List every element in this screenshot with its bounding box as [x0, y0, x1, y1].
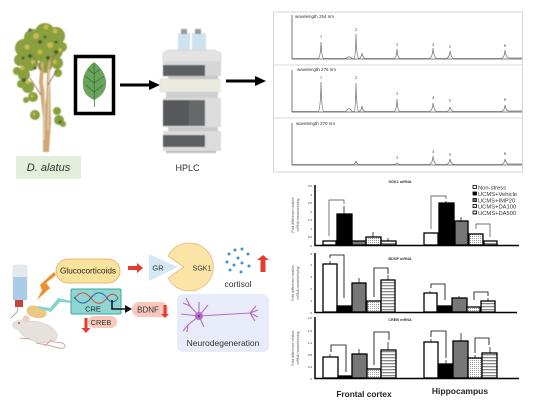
- bar chart: SGK1 mRNA: 1.5: [308, 218, 312, 222]
- chart legend: [473, 186, 517, 217]
- label: D. alatus: [16, 156, 81, 179]
- label: cortisol: cortisol: [225, 279, 252, 289]
- bar chart: SGK1 mRNA: SGK1 mRNA: [388, 180, 412, 184]
- bar chart: SGK1 mRNA: 0: [310, 244, 312, 248]
- callout: CREB: CREB: [91, 318, 111, 327]
- icon: mouse: [12, 316, 65, 348]
- callout: Glucocorticoids: [56, 259, 120, 283]
- bar chart: SGK1 mRNA: 3.5: [308, 184, 312, 188]
- icon: cortisol dots: [226, 248, 250, 274]
- chromatogram: wavelength 370 nm: wavelength 370 nm: [296, 121, 335, 126]
- panel: CRE with DNA: [71, 289, 121, 314]
- bar chart: CREB mRNA: CREB mRNA: [388, 318, 412, 322]
- bar chart: BDNF mRNA: 1: [310, 299, 312, 303]
- chart legend: UCMS+IMP20: [478, 198, 515, 204]
- bar chart: BDNF mRNA: 2: [310, 287, 312, 291]
- icon: SGK1 enzyme: SGK1: [193, 266, 211, 272]
- bar chart: BDNF mRNA: 5: [310, 252, 312, 256]
- bar chart: BDNF mRNA: 3: [310, 275, 312, 279]
- callout: BDNF: BDNF: [137, 306, 159, 314]
- bar chart: CREB mRNA: 0.8: [308, 353, 312, 357]
- chromatogram: wavelength 370 nm: 5: [449, 152, 452, 157]
- chromatogram: wavelength 370 nm: 4: [432, 149, 435, 154]
- arrow: cortisol up: [257, 255, 269, 272]
- bar chart: SGK1 mRNA: 2: [310, 210, 312, 214]
- icon: GR receptor: GR: [152, 264, 164, 272]
- chromatogram: wavelength 275 nm: wavelength 275 nm: [297, 67, 336, 72]
- callout: CREB: [82, 316, 117, 333]
- bar chart: CREB mRNA: mRNA housekeeping: [296, 332, 300, 364]
- bar chart: BDNF mRNA: mRNA housekeeping: [296, 267, 300, 299]
- bar chart: CREB mRNA: 1.6: [308, 329, 312, 333]
- chromatogram: wavelength 254 nm: wavelength 254 nm: [295, 14, 334, 19]
- chromatogram: wavelength 275 nm: 1: [320, 75, 322, 80]
- icon: HPLC instrument: [160, 29, 221, 153]
- chart legend: UCMS+DA100: [478, 204, 516, 210]
- chart legend: Non-stress: [478, 186, 506, 192]
- bar chart: CREB mRNA: 1.2: [308, 341, 312, 345]
- panel: HPLC chromatograms: [273, 12, 522, 172]
- bar chart: CREB mRNA: 0: [310, 377, 312, 381]
- bar chart: SGK1 mRNA: mRNA housekeeping: [296, 199, 300, 231]
- bar chart: CREB mRNA: 2.0: [308, 316, 312, 320]
- arrow: CRE to BDNF: [112, 300, 132, 313]
- chromatogram: wavelength 254 nm: 3: [396, 42, 399, 47]
- label: D. alatus: D. alatus: [27, 162, 71, 174]
- chromatogram: wavelength 254 nm: [292, 14, 522, 59]
- chromatogram: wavelength 275 nm: [292, 67, 522, 112]
- arrow: HPLC to chromatogram: [226, 76, 266, 86]
- chromatogram: wavelength 254 nm: 2: [355, 27, 357, 32]
- icon: neuron: [181, 298, 258, 332]
- callout: BDNF: [132, 302, 169, 318]
- icon: brain tissue: [27, 305, 47, 318]
- bar chart: BDNF mRNA: BDNF mRNA: [388, 257, 412, 261]
- label: HPLC: HPLC: [175, 163, 200, 173]
- chromatogram: wavelength 275 nm: 5: [449, 98, 452, 103]
- chromatogram: wavelength 275 nm: 2: [355, 75, 357, 80]
- callout: Glucocorticoids: Glucocorticoids: [60, 266, 116, 276]
- bar chart: SGK1 mRNA: 3: [310, 193, 312, 197]
- bar chart: SGK1 mRNA: [291, 180, 519, 248]
- chart legend: UCMS+Vehicle: [478, 192, 517, 198]
- panel: CRE with DNA: CRE: [85, 304, 101, 314]
- panel: Neurodegeneration: Neurodegeneration: [187, 338, 260, 348]
- chromatogram: wavelength 275 nm: 6: [504, 97, 507, 102]
- label: Frontal cortex: Frontal cortex: [336, 389, 392, 399]
- icon: tree: [13, 23, 67, 152]
- bar chart: SGK1 mRNA: 1: [310, 227, 312, 231]
- chromatogram: wavelength 254 nm: 5: [449, 44, 452, 49]
- bar chart: CREB mRNA: [291, 316, 519, 381]
- chromatogram: wavelength 370 nm: 3: [396, 155, 399, 160]
- bar chart: SGK1 mRNA: 0.5: [308, 235, 312, 239]
- chromatogram: wavelength 254 nm: 1: [320, 34, 322, 39]
- chromatogram: wavelength 370 nm: 6: [504, 151, 507, 156]
- bar chart: BDNF mRNA: 0: [310, 311, 312, 315]
- chromatogram: wavelength 275 nm: 3: [396, 91, 399, 96]
- chromatogram: wavelength 370 nm: [292, 121, 522, 165]
- bar chart: CREB mRNA: 0.4: [308, 365, 312, 369]
- icon: leaf in frame: [76, 56, 114, 114]
- arrow: red right: [128, 263, 143, 273]
- chromatogram: wavelength 254 nm: 4: [432, 42, 435, 47]
- icon: GR receptor: [149, 254, 178, 281]
- icon: teal lightning: [38, 298, 72, 312]
- chromatogram: wavelength 254 nm: 6: [504, 43, 507, 48]
- panel: Neurodegeneration: [177, 294, 269, 352]
- icon: orange lightning: [37, 272, 56, 300]
- bar chart: BDNF mRNA: [291, 252, 517, 315]
- arrow: leaf to HPLC: [120, 80, 160, 90]
- chart legend: UCMS+DA500: [478, 211, 516, 217]
- bar chart: SGK1 mRNA: 2.5: [308, 201, 312, 205]
- bar chart: SGK1 mRNA: Fold difference relative: [291, 197, 295, 233]
- label: Hippocampus: Hippocampus: [432, 386, 488, 396]
- chromatogram: wavelength 275 nm: 4: [432, 95, 435, 100]
- bar chart: BDNF mRNA: 4: [310, 263, 312, 267]
- icon: water bottle: [11, 265, 27, 318]
- bar chart: BDNF mRNA: Fold difference relative: [291, 265, 295, 301]
- icon: SGK1 enzyme: [168, 243, 213, 291]
- bar chart: CREB mRNA: Fold difference relative: [291, 330, 295, 366]
